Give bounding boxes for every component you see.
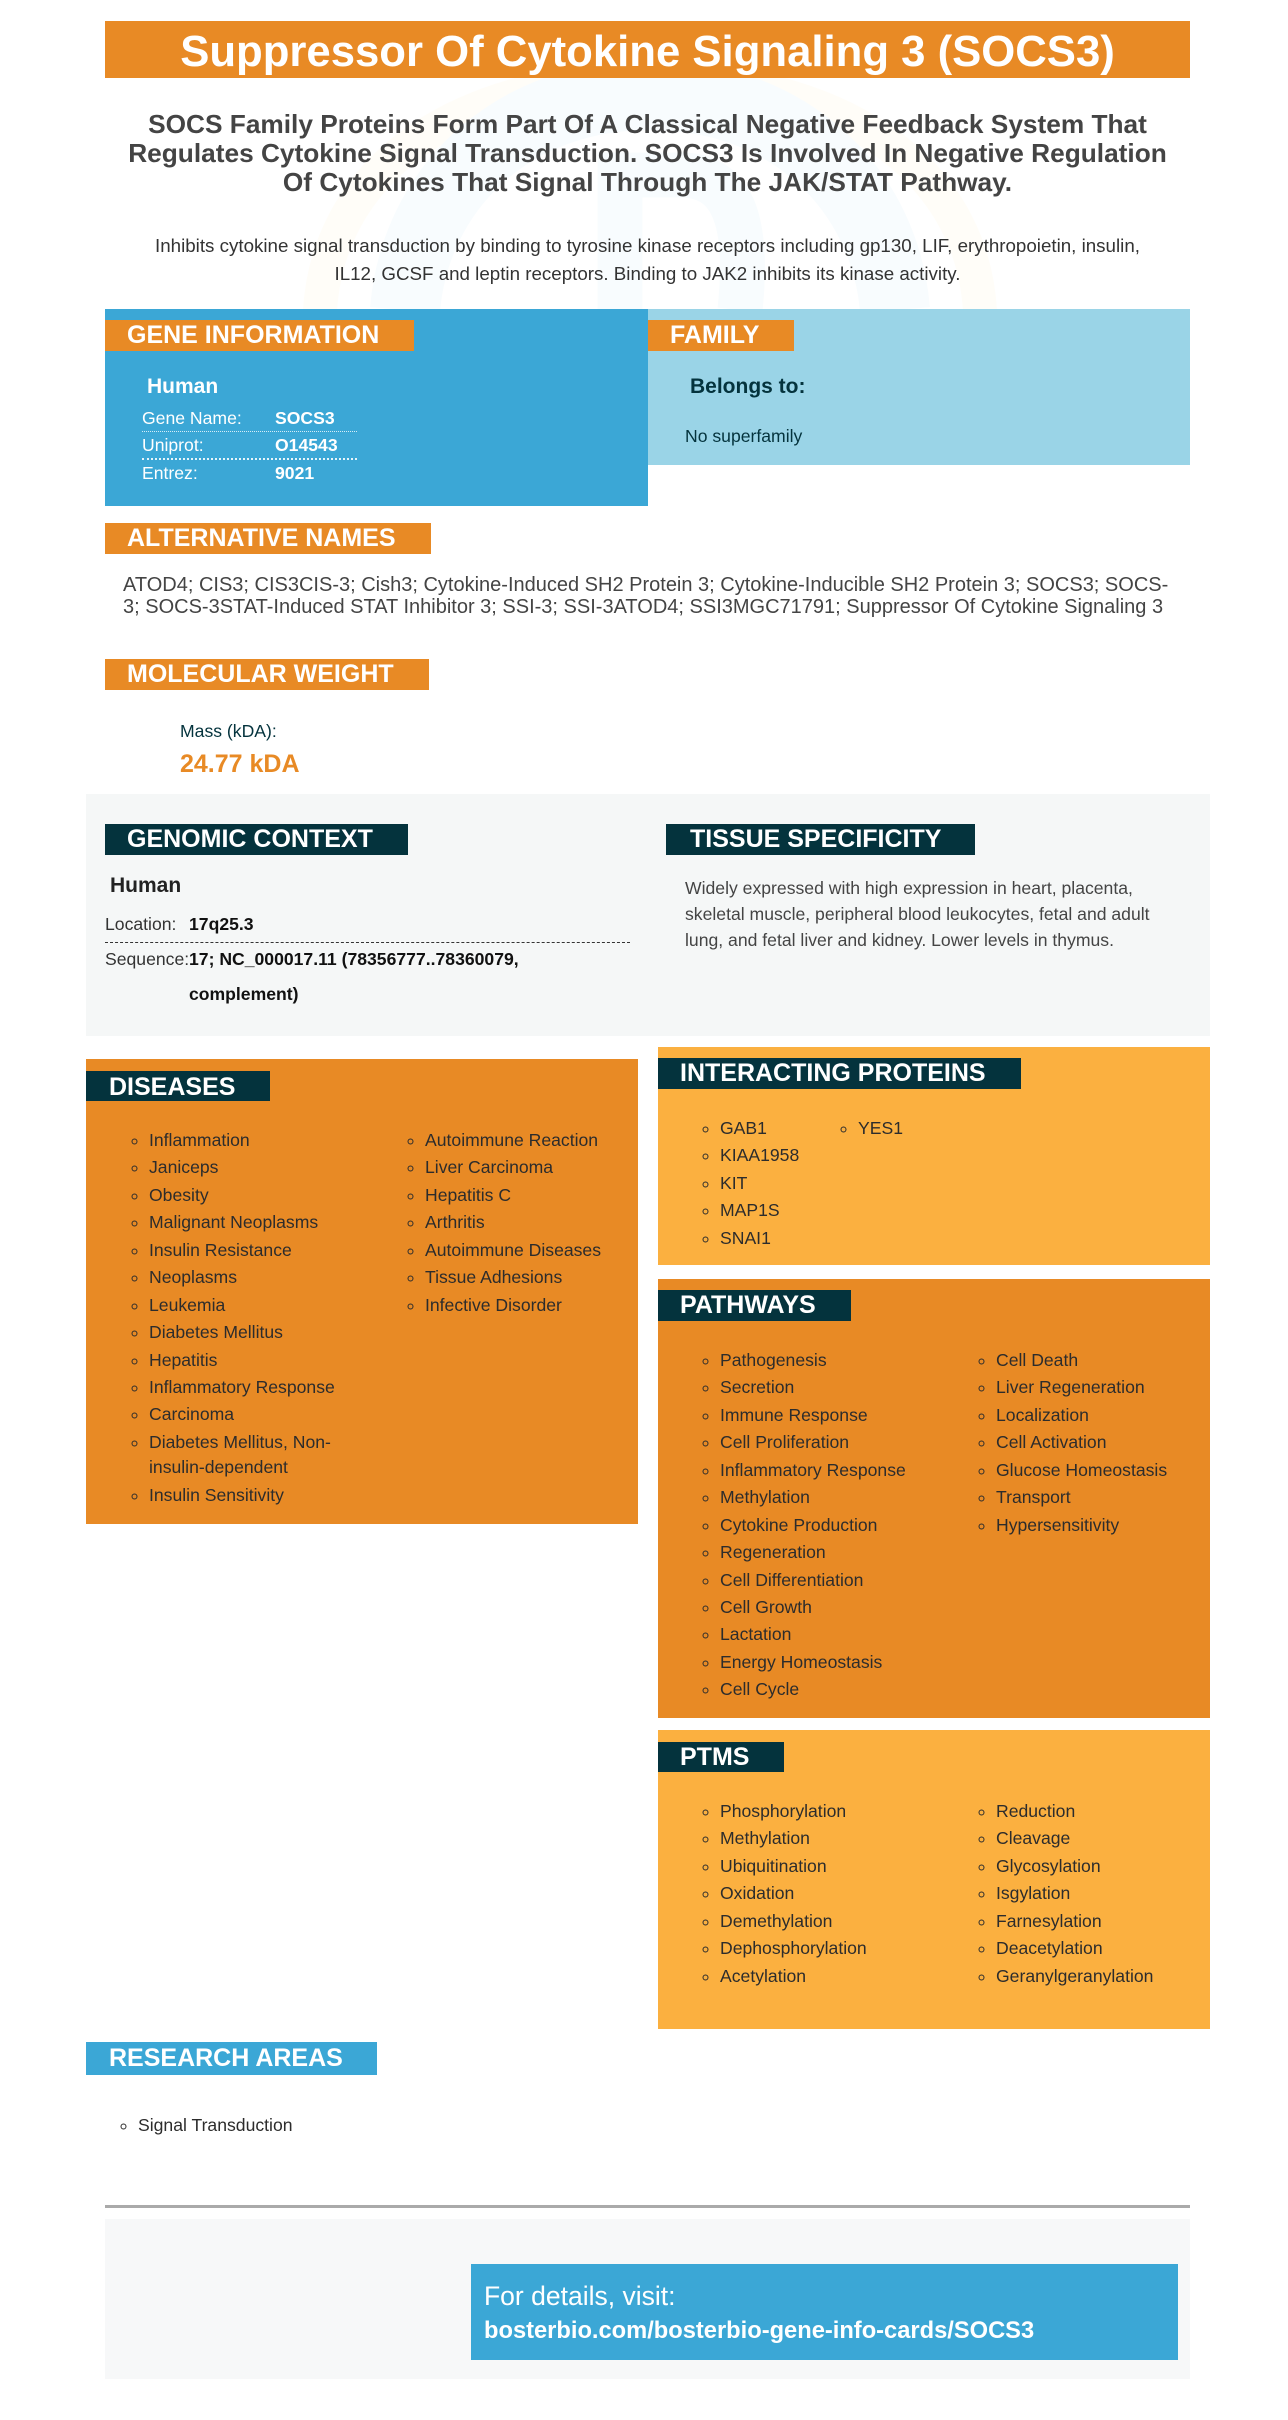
- sequence row: complement): [189, 984, 298, 1004]
- callout: details link: [471, 2264, 1178, 2360]
- list: diseases column 2: Autoimmune Reaction: [425, 1130, 598, 1150]
- list: pathways column 1: Secretion: [720, 1377, 794, 1397]
- molecular weight value: 24.77 kDA: [180, 750, 300, 778]
- list: diseases column 1: Hepatitis: [149, 1350, 217, 1370]
- list: research areas: Signal Transduction: [138, 2115, 293, 2135]
- species label: Human: [147, 375, 218, 398]
- list: PTMs column 1: Oxidation: [720, 1883, 794, 1903]
- list: pathways column 1: Cell Growth: [720, 1597, 812, 1617]
- heading: genomic context: GENOMIC CONTEXT: [127, 825, 373, 853]
- gene info table: 9021: [275, 463, 314, 483]
- list: diseases column 2: Arthritis: [425, 1212, 485, 1232]
- alternative names text: ATOD4; CIS3; CIS3CIS-3; Cish3; Cytokine-Induced SH2 Protein 3; Cytokine-Inducible SH2 Protein 3; SOCS3; SOCS-: [123, 574, 1168, 596]
- tissue specificity text: [685, 878, 1150, 950]
- list: pathways column 1: Cell Proliferation: [720, 1432, 849, 1452]
- list: PTMs column 1: Demethylation: [720, 1911, 832, 1931]
- heading: research areas: RESEARCH AREAS: [109, 2044, 343, 2072]
- tissue specificity text: skeletal muscle, peripheral blood leukocytes, fetal and adult: [685, 904, 1150, 924]
- list: PTMs column 1: [702, 1801, 867, 1986]
- family value: No superfamily: [685, 426, 802, 446]
- list: diseases column 2: [408, 1130, 601, 1315]
- alternative names text: [123, 574, 1168, 618]
- list: interacting proteins column 2: YES1: [858, 1118, 903, 1138]
- gene info table: O14543: [275, 435, 338, 455]
- heading: family: FAMILY: [670, 321, 759, 349]
- heading: diseases: [86, 1071, 270, 1101]
- tissue specificity text: Widely expressed with high expression in heart, placenta,: [685, 878, 1133, 898]
- list: pathways column 2: Transport: [996, 1487, 1071, 1507]
- list: diseases column 2: Hepatitis C: [425, 1185, 511, 1205]
- list: PTMs column 2: Farnesylation: [996, 1911, 1102, 1931]
- panel: genomic context and tissue specificity: [86, 794, 1210, 1036]
- alternative names text: 3; SOCS-3STAT-Induced STAT Inhibitor 3; SSI-3; SSI-3ATOD4; SSI3MGC71791; Suppressor Of Cytokine Signaling 3: [123, 596, 1163, 618]
- list: diseases column 1: Inflammatory Response: [149, 1377, 335, 1397]
- heading: PTMs: PTMS: [680, 1743, 749, 1771]
- list: pathways column 1: Pathogenesis: [720, 1350, 827, 1370]
- title: Suppressor Of Cytokine Signaling 3 (SOCS3): [180, 27, 1115, 76]
- list: interacting proteins column 1: GAB1: [720, 1118, 767, 1138]
- heading: PTMs: [658, 1742, 784, 1772]
- heading: research areas: [86, 2042, 377, 2075]
- subtitle: SOCS Family Proteins Form Part Of A Classical Negative Feedback System That: [148, 109, 1147, 139]
- list: interacting proteins column 1: [702, 1118, 799, 1248]
- list: pathways column 2: Glucose Homeostasis: [996, 1460, 1167, 1480]
- list: pathways column 2: [978, 1350, 1167, 1535]
- list: pathways column 1: Cell Differentiation: [720, 1570, 863, 1590]
- callout: details link: For details, visit:: [484, 2281, 675, 2311]
- list: diseases column 1: Carcinoma: [149, 1404, 234, 1424]
- list: pathways column 2: Liver Regeneration: [996, 1377, 1145, 1397]
- molecular weight value: Mass (kDA):: [180, 721, 277, 741]
- gene info table: SOCS3: [275, 408, 335, 428]
- species label: Human: [110, 874, 181, 897]
- list: diseases column 1: Insulin Sensitivity: [149, 1485, 284, 1505]
- list: PTMs column 2: Isgylation: [996, 1883, 1070, 1903]
- gene info table: Entrez:: [142, 463, 198, 483]
- list: PTMs column 2: Glycosylation: [996, 1856, 1101, 1876]
- list: PTMs column 1: Methylation: [720, 1828, 810, 1848]
- list: diseases column 1: insulin-dependent: [149, 1457, 288, 1477]
- list: PTMs column 2: Deacetylation: [996, 1938, 1103, 1958]
- belongs to label: Belongs to:: [690, 375, 806, 398]
- list: diseases column 1: Malignant Neoplasms: [149, 1212, 318, 1232]
- list: PTMs column 1: Ubiquitination: [720, 1856, 827, 1876]
- list: pathways column 1: Regeneration: [720, 1542, 826, 1562]
- description: [155, 235, 1140, 284]
- list: pathways column 1: Immune Response: [720, 1405, 868, 1425]
- list: diseases column 1: Diabetes Mellitus, Non-: [149, 1432, 331, 1452]
- heading: gene information: GENE INFORMATION: [127, 321, 379, 349]
- subtitle: [128, 109, 1167, 197]
- list: pathways column 1: Methylation: [720, 1487, 810, 1507]
- heading: tissue specificity: TISSUE SPECIFICITY: [690, 825, 941, 853]
- subtitle: Regulates Cytokine Signal Transduction. SOCS3 Is Involved In Negative Regulation: [128, 138, 1167, 168]
- panel: gene information: [105, 309, 648, 506]
- panel: diseases: [86, 1059, 638, 1524]
- list: diseases column 1: Diabetes Mellitus: [149, 1322, 283, 1342]
- panel: interacting proteins: [658, 1047, 1210, 1265]
- list: pathways column 1: Inflammatory Response: [720, 1460, 906, 1480]
- heading: interacting proteins: INTERACTING PROTEINS: [680, 1059, 986, 1087]
- list: diseases column 2: Tissue Adhesions: [425, 1267, 562, 1287]
- list: interacting proteins column 1: MAP1S: [720, 1200, 780, 1220]
- list: pathways column 1: Cytokine Production: [720, 1515, 877, 1535]
- list: interacting proteins column 1: KIT: [720, 1173, 747, 1193]
- list: diseases column 1: Obesity: [149, 1185, 209, 1205]
- location row: [105, 914, 630, 943]
- panel: footer: [105, 2219, 1190, 2379]
- heading: family: [648, 320, 794, 351]
- list: pathways column 1: Energy Homeostasis: [720, 1652, 882, 1672]
- sequence row: Sequence:: [105, 949, 189, 969]
- list: PTMs column 1: Dephosphorylation: [720, 1938, 867, 1958]
- tissue specificity text: lung, and fetal liver and kidney. Lower levels in thymus.: [685, 930, 1114, 950]
- list: diseases column 2: Autoimmune Diseases: [425, 1240, 601, 1260]
- list: pathways column 2: Hypersensitivity: [996, 1515, 1119, 1535]
- gene info table: Uniprot:: [142, 435, 204, 455]
- panel: PTMs: [658, 1730, 1210, 2029]
- list: pathways column 1: Cell Cycle: [720, 1679, 799, 1699]
- heading: alternative names: ALTERNATIVE NAMES: [127, 524, 396, 552]
- watermark logo: [300, 70, 1000, 310]
- list: interacting proteins column 1: KIAA1958: [720, 1145, 799, 1165]
- list: pathways column 2: Cell Activation: [996, 1432, 1107, 1452]
- list: diseases column 2: Liver Carcinoma: [425, 1157, 553, 1177]
- molecular weight value: [180, 721, 300, 778]
- callout: details link: bosterbio.com/bosterbio-gene-info-cards/SOCS3: [484, 2318, 1034, 2344]
- panel: pathways: [658, 1279, 1210, 1718]
- heading: diseases: DISEASES: [109, 1073, 235, 1101]
- list: pathways column 2: Localization: [996, 1405, 1089, 1425]
- heading: pathways: [658, 1290, 851, 1321]
- list: PTMs column 1: Phosphorylation: [720, 1801, 846, 1821]
- subtitle: Of Cytokines That Signal Through The JAK/STAT Pathway.: [283, 167, 1012, 197]
- description: Inhibits cytokine signal transduction by binding to tyrosine kinase receptors including gp130, LIF, erythropoietin, insulin,: [155, 235, 1140, 256]
- heading: pathways: PATHWAYS: [680, 1291, 816, 1319]
- gene info table: Gene Name:: [142, 408, 242, 428]
- location row: 17q25.3: [189, 914, 254, 934]
- description: IL12, GCSF and leptin receptors. Binding to JAK2 inhibits its kinase activity.: [334, 263, 960, 284]
- list: diseases column 1: [132, 1130, 335, 1505]
- list: PTMs column 2: [978, 1801, 1153, 1986]
- list: interacting proteins column 1: SNAI1: [720, 1228, 771, 1248]
- list: diseases column 1: Insulin Resistance: [149, 1240, 292, 1260]
- list: pathways column 2: Cell Death: [996, 1350, 1078, 1370]
- list: diseases column 1: Janiceps: [149, 1157, 218, 1177]
- list: diseases column 1: Neoplasms: [149, 1267, 237, 1287]
- panel: family: [648, 309, 1190, 465]
- list: PTMs column 2: Cleavage: [996, 1828, 1070, 1848]
- heading: molecular weight: MOLECULAR WEIGHT: [127, 660, 394, 688]
- list: PTMs column 2: Geranylgeranylation: [996, 1966, 1153, 1986]
- list: PTMs column 2: Reduction: [996, 1801, 1075, 1821]
- list: PTMs column 1: Acetylation: [720, 1966, 806, 1986]
- list: diseases column 1: Leukemia: [149, 1295, 225, 1315]
- list: diseases column 1: Inflammation: [149, 1130, 250, 1150]
- gene info table: [142, 408, 357, 483]
- sequence row: [105, 948, 519, 1004]
- sequence row: 17; NC_000017.11 (78356777..78360079,: [189, 948, 519, 968]
- location row: Location:: [105, 914, 176, 934]
- list: diseases column 2: Infective Disorder: [425, 1295, 562, 1315]
- list: pathways column 1: [702, 1350, 906, 1699]
- list: pathways column 1: Lactation: [720, 1624, 791, 1644]
